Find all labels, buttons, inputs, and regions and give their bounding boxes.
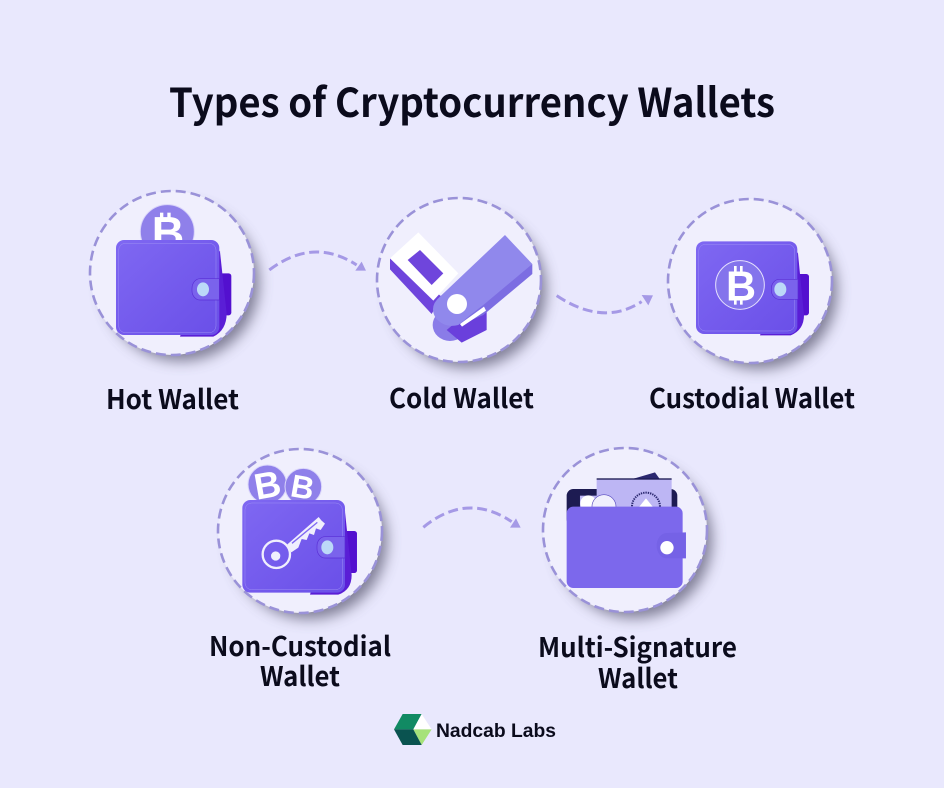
icon: non-custodial wallet with key: B xyxy=(251,463,284,508)
label: non-custodial wallet xyxy=(209,625,391,694)
dashed circle xyxy=(90,191,254,355)
panel: cold wallet xyxy=(377,198,546,368)
label: non-custodial wallet: Wallet xyxy=(260,655,340,694)
icon: multi-signature wallet xyxy=(567,472,686,588)
label: multi-signature wallet: Multi-Signature xyxy=(538,626,737,665)
panel: custodial wallet xyxy=(668,199,837,369)
title: Types of Cryptocurrency Wallets xyxy=(169,71,775,129)
circle shadow xyxy=(231,463,387,619)
panel: non-custodial wallet xyxy=(218,449,387,619)
arrow: cold to custodial xyxy=(557,295,653,313)
label: non-custodial wallet: Non-Custodial xyxy=(209,625,391,664)
icon: custodial wallet xyxy=(696,241,809,335)
logo text: Nadcab Labs xyxy=(436,721,556,742)
dashed circle xyxy=(543,448,707,612)
icon: non-custodial wallet with key xyxy=(242,463,357,595)
icon: hot wallet: B xyxy=(152,207,184,258)
circle shadow xyxy=(556,462,712,618)
dashed circle xyxy=(668,199,832,363)
icon: custodial wallet: B xyxy=(726,262,756,309)
circle shadow xyxy=(681,213,837,369)
label: hot wallet: Hot Wallet xyxy=(106,378,239,417)
icon: non-custodial wallet with key: B xyxy=(288,467,317,507)
label: custodial wallet: Custodial Wallet xyxy=(649,377,855,416)
circle shadow xyxy=(390,212,546,368)
icon: hexagon logo xyxy=(394,714,432,745)
circle shadow xyxy=(103,205,259,361)
arrow: hot to cold xyxy=(269,252,366,271)
panel: hot wallet xyxy=(90,191,259,361)
panel: multi-signature wallet xyxy=(543,448,712,618)
label: cold wallet: Cold Wallet xyxy=(389,377,534,416)
label: multi-signature wallet xyxy=(538,626,737,696)
icon: hardware wallet xyxy=(390,232,532,343)
logo: Nadcab Labs xyxy=(394,714,556,745)
arrow: non-custodial to multi-signature xyxy=(423,508,521,528)
dashed circle xyxy=(377,198,541,362)
icon: hot wallet xyxy=(116,205,231,337)
label: multi-signature wallet: Wallet xyxy=(598,657,678,696)
dashed circle xyxy=(218,449,382,613)
